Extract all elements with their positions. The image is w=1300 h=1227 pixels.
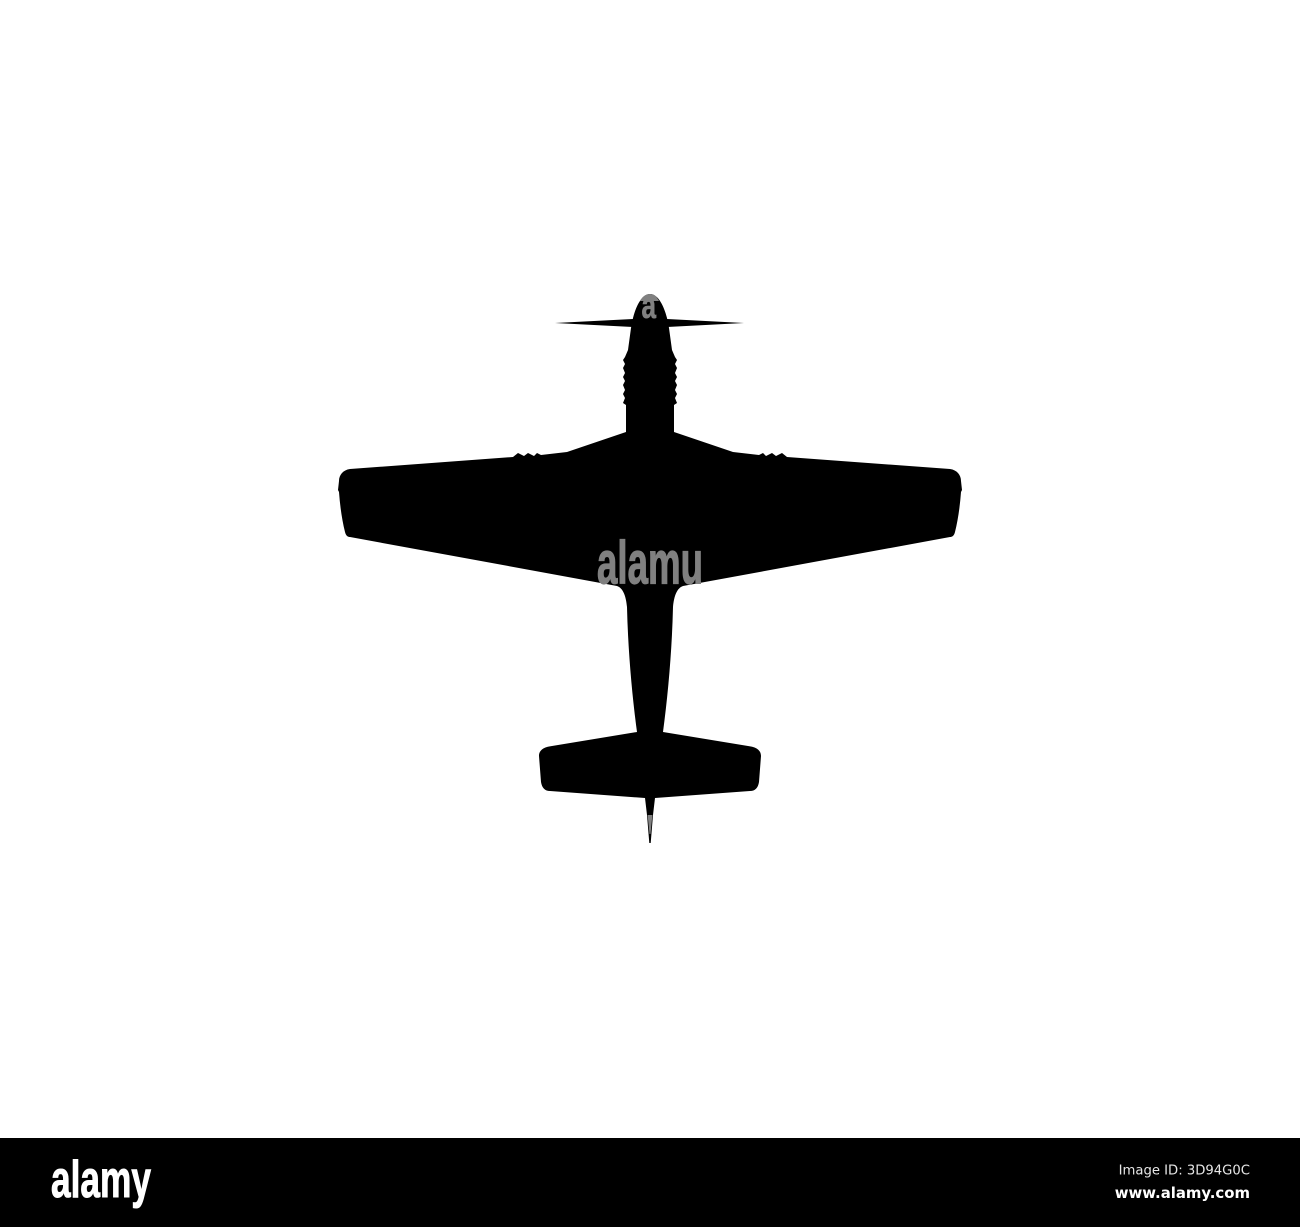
footer logo: alamy [51,1151,151,1209]
fuselage, wings and tail [338,294,962,843]
footer background [0,1138,1300,1227]
tail cone watermark tint [648,815,652,834]
propeller blades [555,319,744,327]
spinner watermark tint [640,294,659,301]
centre watermark: alamu [597,530,703,596]
icon: aircraft silhouette [338,294,962,843]
website url: www.alamy.com [1115,1184,1250,1202]
image id: Image ID: 3D94G0C [1119,1164,1250,1178]
footer band [0,1138,1300,1227]
spinner watermark letter: a [642,285,656,326]
